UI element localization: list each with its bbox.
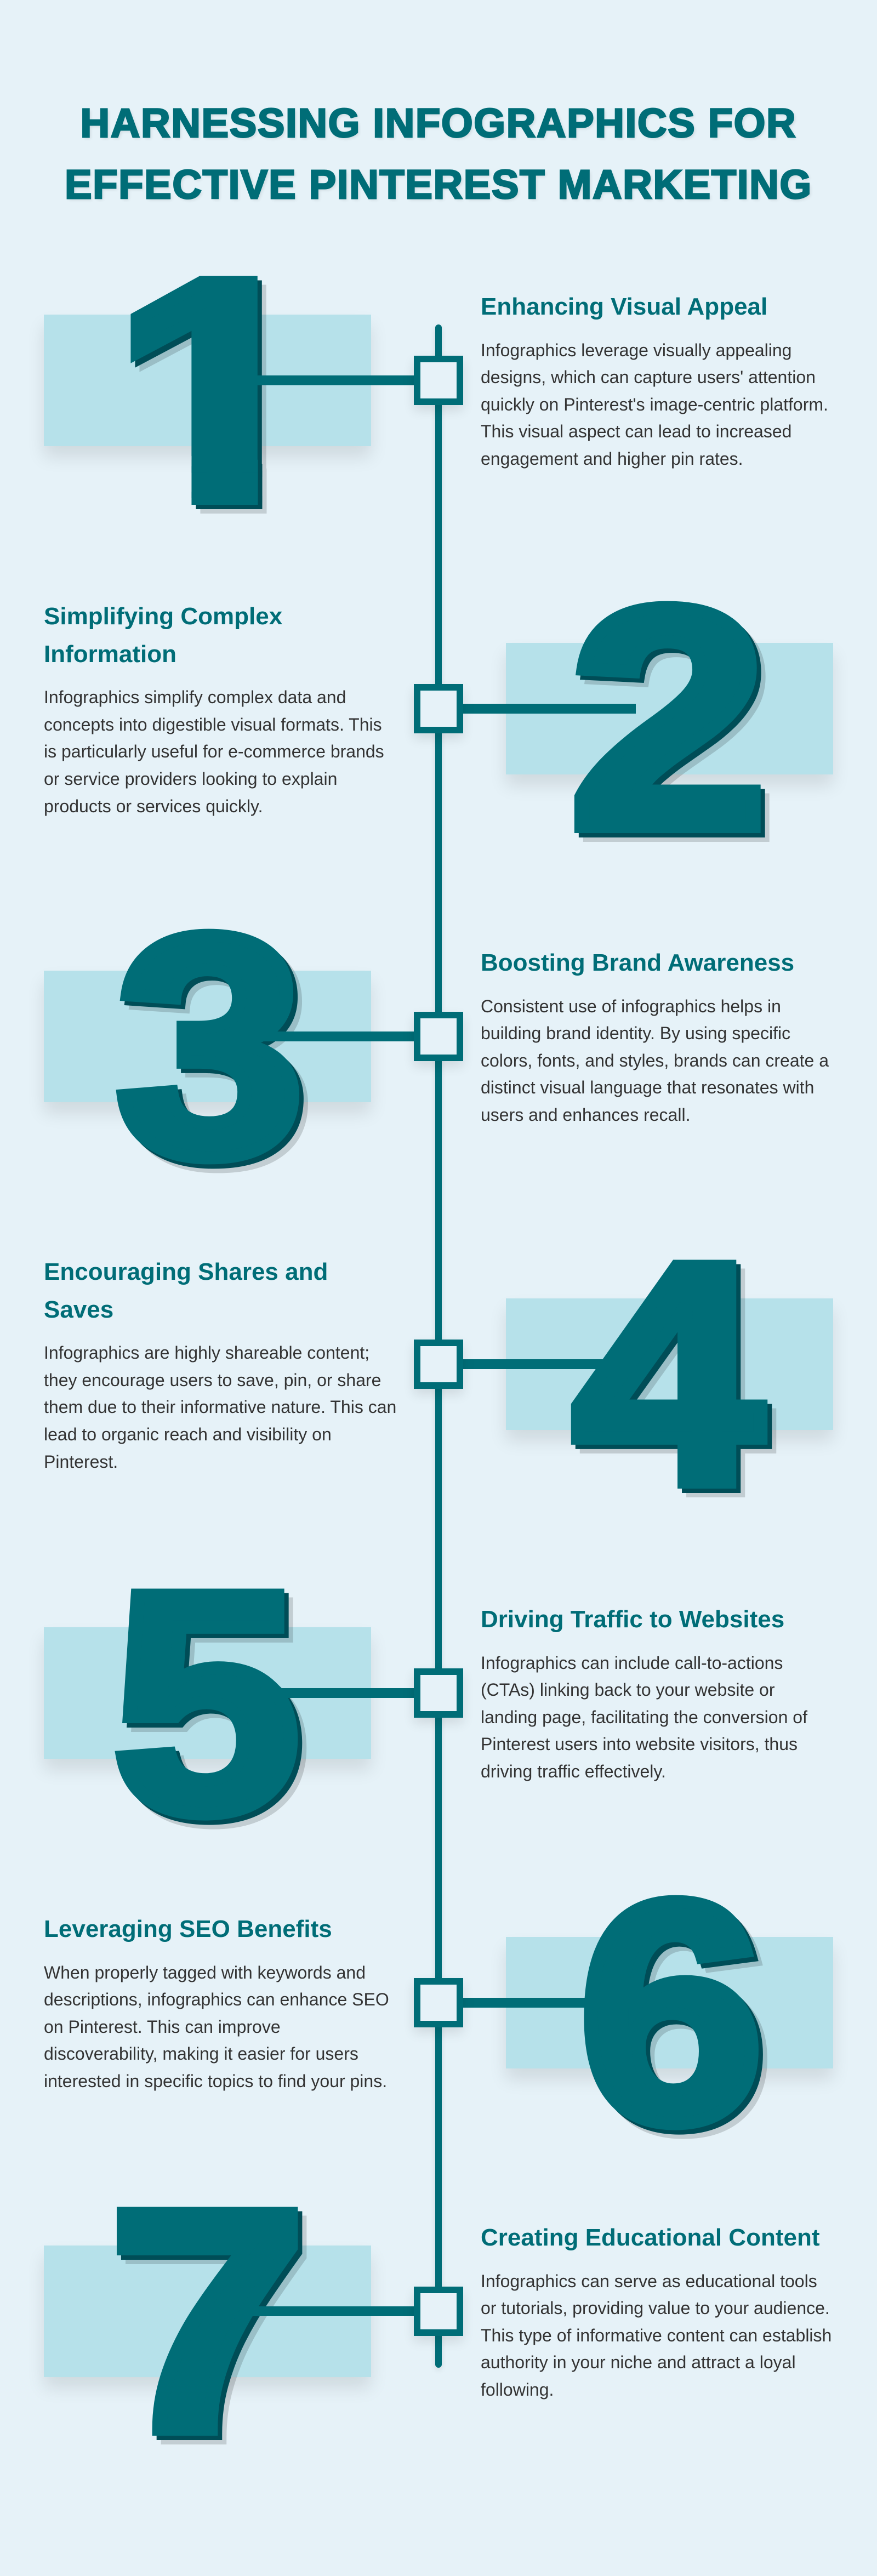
text: Enhancing Visual Appeal: This visual aspect can lead to increased [481,421,791,441]
number 4: 4 [573,1199,762,1549]
text: Creating Educational Content [481,2224,832,2400]
number 3: 3 [116,871,304,1221]
panel: step 7 [41,2146,832,2496]
text: Driving Traffic to Websites: Infographics can include call-to-actions [481,1653,783,1673]
text: Leveraging SEO Benefits: on Pinterest. This can improve [44,2017,281,2037]
text: Simplifying Complex Information [44,603,384,816]
text: Simplifying Complex Information: is particularly useful for e-commerce brands [44,742,384,761]
connector 6 [463,1998,636,2008]
text: Driving Traffic to Websites: landing page, facilitating the conversion of [481,1707,807,1727]
text: Leveraging SEO Benefits: When properly tagged with keywords and [44,1963,366,1982]
text: Creating Educational Content: This type of informative content can establish [481,2326,832,2345]
text: Simplifying Complex Information: or service providers looking to explain [44,769,337,789]
panel: step 6 [44,1837,836,2187]
text: Encouraging Shares and Saves: Infographics are highly shareable content; [44,1343,369,1363]
connector 4 [463,1359,636,1369]
text: Boosting Brand Awareness: Consistent use of infographics helps in [481,996,781,1016]
text: Enhancing Visual Appeal: engagement and higher pin rates. [481,449,743,469]
connector 7 [241,2306,414,2316]
panel: step 5 [41,1528,808,1878]
background rectangle 6 [506,1937,833,2068]
text: Enhancing Visual Appeal: Infographics leverage visually appealing [481,340,791,360]
text: Creating Educational Content: or tutorials, providing value to your audience. [481,2298,830,2318]
text: Leveraging SEO Benefits: descriptions, infographics can enhance SEO [44,1990,389,2009]
number 6: 6 [579,1837,764,2187]
number 1: 1 [113,215,318,565]
timeline node 2 [414,684,463,733]
panel: step 4 [44,1199,836,1549]
background rectangle 1 [44,315,371,446]
timeline node 5 [414,1668,463,1718]
number 2: 2 [570,543,767,893]
text: Creating Educational Content: Infographics can serve as educational tools [481,2271,817,2291]
text: Creating Educational Content: following. [481,2380,554,2400]
background rectangle 7 [44,2246,371,2377]
number 7: 7 [109,2146,306,2496]
number 5: 5 [113,1528,300,1878]
text: Driving Traffic to Websites: Pinterest users into website visitors, thus [481,1734,798,1754]
text: Leveraging SEO Benefits: interested in specific topics to find your pins. [44,2071,387,2091]
text: Driving Traffic to Websites: (CTAs) linking back to your website or [481,1680,775,1700]
text: Enhancing Visual Appeal: quickly on Pinterest's image-centric platform. [481,395,828,414]
title: HARNESSING INFOGRAPHICS FOR [81,100,796,146]
text: Boosting Brand Awareness: Boosting Brand Awareness [481,949,794,976]
text: Leveraging SEO Benefits: Leveraging SEO Benefits [44,1916,332,1942]
connector 2 [463,704,636,714]
text: Simplifying Complex Information: Infographics simplify complex data and [44,687,346,707]
title: EFFECTIVE PINTEREST MARKETING [65,162,812,207]
text: Creating Educational Content: authority in your niche and attract a loyal [481,2352,796,2372]
text: Boosting Brand Awareness: building brand identity. By using specific [481,1023,790,1043]
text: Simplifying Complex Information: Information [44,641,176,668]
panel: step 1 [41,276,828,514]
text: Simplifying Complex Information: Simplifying Complex [44,603,282,630]
text: Enhancing Visual Appeal [481,293,828,469]
title [65,100,812,207]
text: Driving Traffic to Websites: Driving Traffic to Websites [481,1606,784,1633]
text: Encouraging Shares and Saves: Encouraging Shares and [44,1258,328,1285]
background rectangle 3 [44,971,371,1102]
text: Encouraging Shares and Saves [44,1258,396,1472]
text: Boosting Brand Awareness: colors, fonts, and styles, brands can create a [481,1051,829,1070]
timeline node 7 [414,2287,463,2336]
text: Boosting Brand Awareness: distinct visual language that resonates with [481,1078,814,1097]
panel: step 2 [44,543,836,893]
background rectangle 4 [506,1298,833,1430]
text: Encouraging Shares and Saves: lead to organic reach and visibility on [44,1424,332,1444]
text: Boosting Brand Awareness: users and enhances recall. [481,1105,690,1125]
timeline node 6 [414,1978,463,2027]
text: Creating Educational Content: Creating Educational Content [481,2224,819,2251]
timeline node 1 [414,356,463,405]
text: Leveraging SEO Benefits: discoverability, making it easier for users [44,2044,358,2064]
text: Driving Traffic to Websites [481,1606,808,1781]
text: Simplifying Complex Information: concepts into digestible visual formats. This [44,715,382,734]
text: Encouraging Shares and Saves: them due to their informative nature. This can [44,1397,396,1417]
text: Encouraging Shares and Saves: they encourage users to save, pin, or share [44,1370,381,1390]
connector 3 [241,1031,414,1041]
panel: step 3 [41,871,829,1221]
text: Leveraging SEO Benefits [44,1916,389,2091]
text: Boosting Brand Awareness [481,949,829,1125]
text: Enhancing Visual Appeal: designs, which can capture users' attention [481,367,816,387]
connector 5 [241,1688,414,1698]
text: Simplifying Complex Information: products or services quickly. [44,796,263,816]
timeline node 4 [414,1340,463,1389]
timeline node 3 [414,1012,463,1061]
background rectangle 2 [506,643,833,774]
text: Encouraging Shares and Saves: Pinterest. [44,1452,118,1472]
timeline vertical line [435,324,442,2368]
text: Encouraging Shares and Saves: Saves [44,1296,113,1323]
text: Driving Traffic to Websites: driving traffic effectively. [481,1762,666,1781]
background rectangle 5 [44,1627,371,1759]
text: Enhancing Visual Appeal: Enhancing Visual Appeal [481,293,767,320]
connector 1 [241,375,414,385]
